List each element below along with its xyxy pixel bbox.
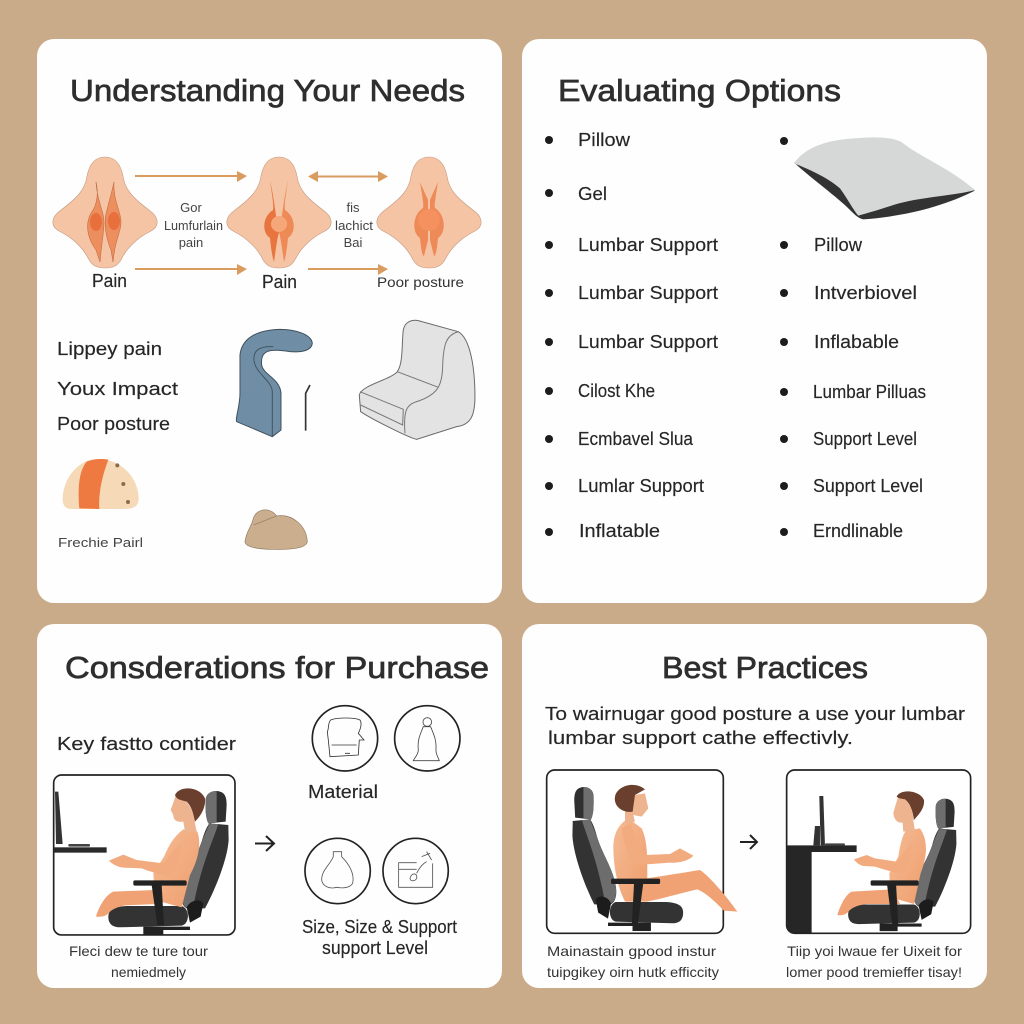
- arrow: top left: [135, 171, 247, 182]
- list: left column: Pillow: [578, 130, 631, 150]
- list: right column: Erndlinable: [813, 521, 903, 541]
- list: right column: Support Level: [813, 476, 923, 496]
- panel: evaluating options: [522, 39, 987, 603]
- illustration: seated person at desk: [54, 775, 235, 935]
- label: pain 2: Pain: [262, 272, 297, 292]
- list: left column: Gel: [578, 184, 607, 204]
- text: intro: [545, 704, 965, 748]
- heading: best practices: Best Practices: [662, 650, 868, 685]
- diagram caption right: Bai: [344, 235, 363, 250]
- label: pain 1: Pain: [92, 271, 127, 291]
- text: intro: lumbar support cathe effectivly.: [548, 728, 853, 748]
- caption: middle scene: tuipgikey oirn hutk efficcity: [547, 964, 719, 980]
- arrow: top right double: [308, 171, 388, 182]
- icon: tan mound: [245, 510, 307, 549]
- panel: considerations for purchase: [37, 624, 502, 988]
- diagram caption right: [335, 200, 373, 250]
- illustration: person reclined with extended leg: [547, 770, 737, 933]
- diagram caption left: Lumfurlain: [164, 218, 223, 233]
- caption: right scene: Tiip yoi lwaue fer Uixeit for: [787, 943, 962, 959]
- list: right column: Lumbar Pilluas: [813, 382, 926, 402]
- caption: middle scene: [547, 943, 719, 980]
- panel: best practices: [522, 624, 987, 988]
- arrow: between scenes: [740, 835, 757, 849]
- icon: cushion shape: [305, 838, 370, 904]
- text: poor posture: Poor posture: [57, 414, 170, 434]
- list: right column: Intverbiovel: [814, 283, 917, 303]
- text: key factors: Key fastto contider: [57, 734, 236, 754]
- list: left column: [545, 130, 718, 541]
- caption: middle scene: Mainastain gpood instur: [547, 943, 716, 959]
- diagram caption left: pain: [179, 235, 203, 250]
- list: left column: Lumbar Support: [578, 332, 718, 352]
- arrow: to factors: [255, 836, 274, 851]
- illustration: person at desk with lumbar support: [787, 770, 971, 933]
- diagram caption left: [164, 200, 223, 250]
- diagram caption right: lachict: [335, 218, 373, 233]
- arrow: bottom left: [135, 264, 247, 275]
- heading: evaluating options: Evaluating Options: [558, 73, 841, 108]
- icon: spine diagram 3: [377, 157, 481, 268]
- list: left column: Lumlar Support: [578, 476, 704, 496]
- caption: right scene: [786, 943, 962, 980]
- icon: spine diagram 2: [227, 157, 331, 268]
- diagram caption left: Gor: [180, 200, 203, 215]
- text: lippey pain: Lippey pain: [57, 339, 162, 359]
- heading: understanding your needs: Understanding Your Needs: [70, 73, 465, 108]
- caption: left scene: Fleci dew te ture tour: [69, 943, 208, 959]
- list: right column: Pillow: [814, 235, 863, 255]
- list: right column: Support Level: [813, 429, 917, 449]
- heading: considerations for purchase: Consderations for Purchase: [65, 650, 489, 685]
- icon: pillow: [794, 137, 975, 219]
- text: frechie pairl: Frechie Pairl: [58, 535, 143, 550]
- arrow: bottom right: [308, 264, 388, 275]
- icon: orange dome: [63, 459, 139, 509]
- diagram caption right: fis: [346, 200, 360, 215]
- label: size and support: support Level: [322, 938, 428, 958]
- label: size and support: [302, 917, 457, 958]
- list: left column: Lumbar Support: [578, 283, 718, 303]
- label: size and support: Size, Size & Support: [302, 917, 457, 937]
- caption: left scene: nemiedmely: [111, 964, 186, 980]
- list: left column: Ecmbavel Slua: [578, 429, 694, 449]
- caption: right scene: lomer pood tremieffer tisay!: [786, 964, 962, 980]
- list: right column: Inflabable: [814, 332, 899, 352]
- caption: left scene: [69, 943, 208, 980]
- text: intro: To wairnugar good posture a use your lumbar: [545, 704, 965, 724]
- panel: understanding your needs: [37, 39, 502, 603]
- list: left column: Cilost Khe: [578, 381, 655, 401]
- icon: spine diagram 1: [53, 157, 157, 268]
- list: right column: [780, 137, 926, 541]
- icon: gray seat cushion: [359, 320, 475, 439]
- label: material: Material: [308, 782, 378, 802]
- icon: bottle shape: [395, 706, 460, 771]
- icon: material seat: [312, 706, 378, 771]
- icon: adjustment box: [383, 838, 448, 904]
- icon: blue lumbar cushion: [236, 329, 312, 437]
- list: left column: Inflatable: [579, 521, 660, 541]
- list: left column: Lumbar Support: [578, 235, 718, 255]
- text: youx impact: Youx Impact: [57, 379, 178, 399]
- label: poor posture: Poor posture: [377, 274, 464, 290]
